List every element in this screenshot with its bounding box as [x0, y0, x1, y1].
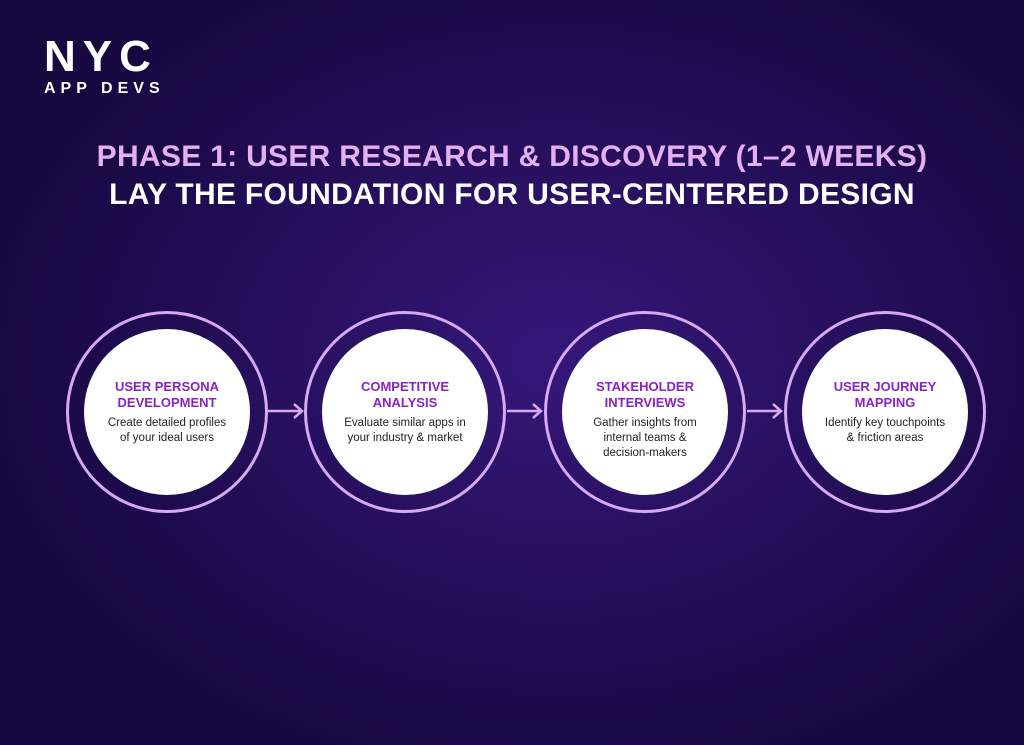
step 2: [304, 311, 506, 513]
step 2: your industry & market: [347, 432, 463, 444]
step 4: USER JOURNEY: [834, 379, 936, 394]
title: PHASE 1: USER RESEARCH & DISCOVERY (1–2 WEEKS): [97, 140, 927, 173]
step 1: USER PERSONA: [115, 379, 219, 394]
step 3: internal teams &: [603, 432, 687, 444]
step 2: COMPETITIVE: [361, 379, 449, 394]
step 2: Evaluate similar apps in: [344, 417, 466, 429]
logo: NYC: [44, 32, 158, 81]
step 4: Identify key touchpoints: [825, 417, 945, 429]
step 4: MAPPING: [855, 395, 915, 410]
logo: APP DEVS: [44, 80, 165, 97]
step 4: [784, 311, 986, 513]
step 3: [544, 311, 746, 513]
step 1: [66, 311, 268, 513]
subtitle: LAY THE FOUNDATION FOR USER-CENTERED DESIGN: [109, 178, 915, 211]
step 1: Create detailed profiles: [108, 417, 226, 429]
step 1: of your ideal users: [120, 432, 214, 444]
step 3: decision-makers: [603, 447, 687, 459]
arrow 3: [747, 403, 783, 419]
step 4: & friction areas: [847, 432, 923, 444]
step 1: DEVELOPMENT: [118, 395, 216, 410]
arrow 1: [268, 403, 304, 419]
step 3: STAKEHOLDER: [596, 379, 694, 394]
step 3: INTERVIEWS: [605, 395, 685, 410]
step 3: Gather insights from: [593, 417, 697, 429]
step 2: ANALYSIS: [373, 395, 437, 410]
arrow 2: [507, 403, 543, 419]
